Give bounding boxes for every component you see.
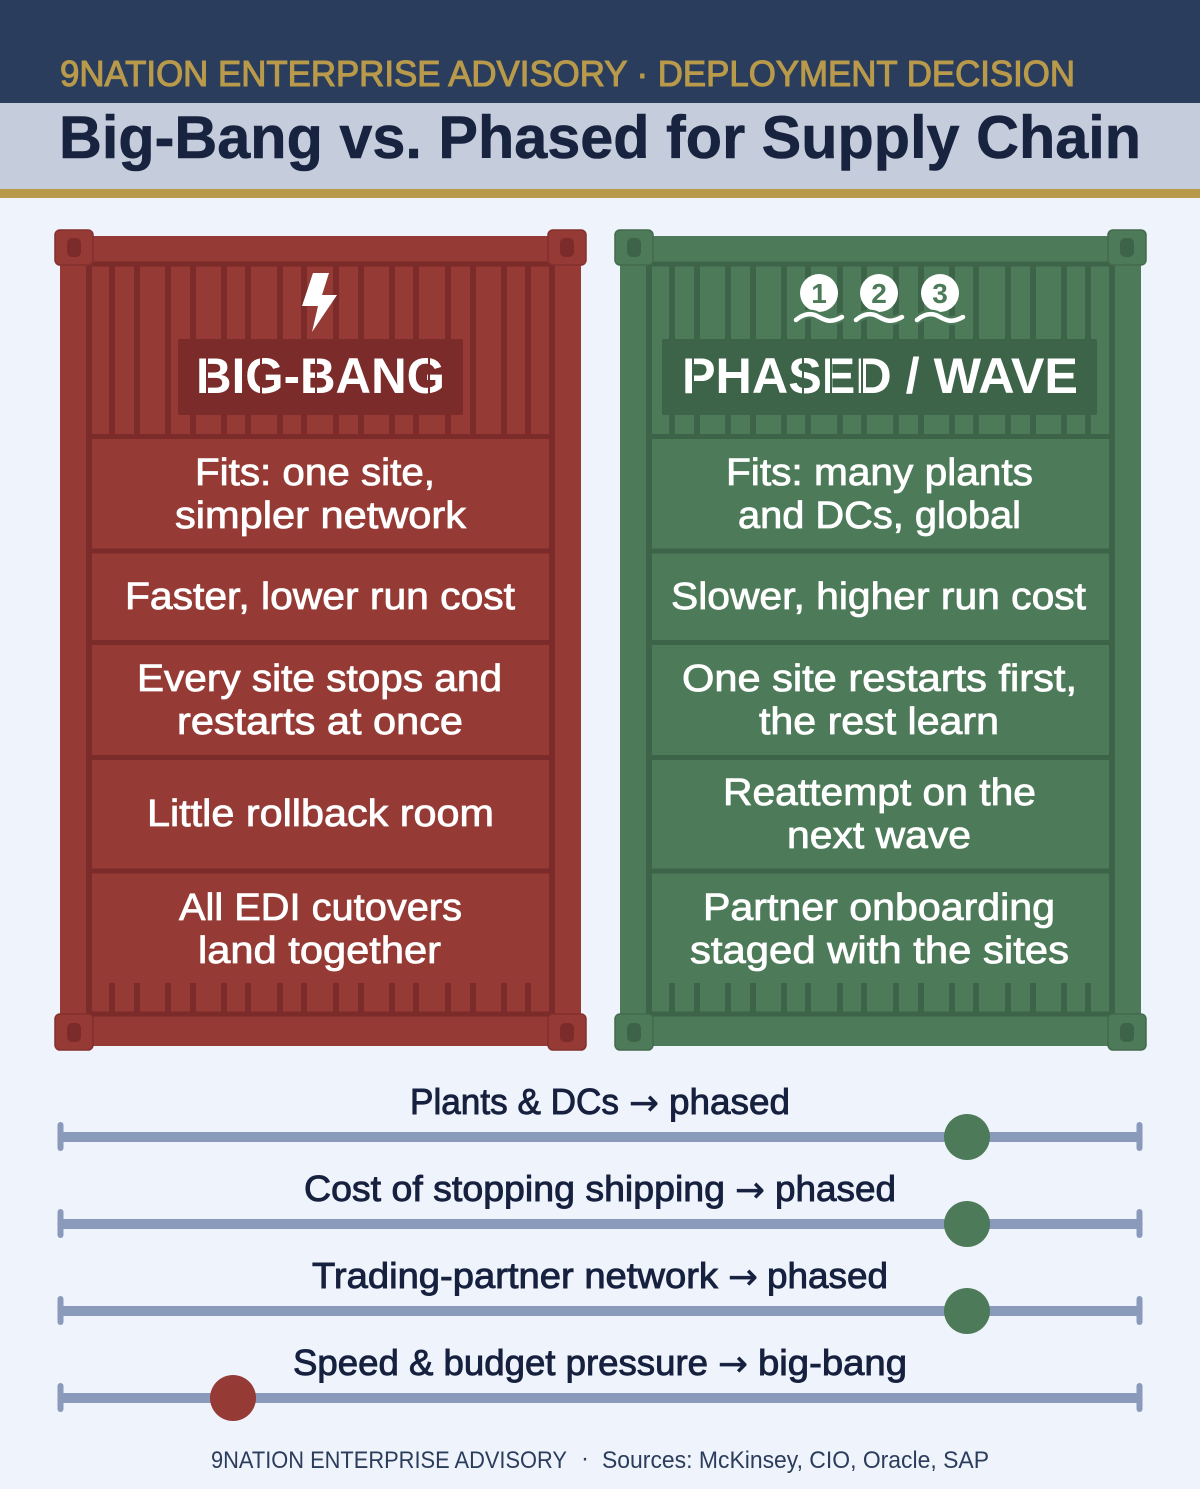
- row: EDI: land together: [198, 930, 441, 972]
- row: speed and cost: Slower, higher run cost: [671, 576, 1086, 618]
- row: fit: [726, 452, 1033, 537]
- row: partner onboarding: staged with the sites: [690, 930, 1069, 972]
- slider: trading-partner network: Trading-partner network: [312, 1255, 719, 1296]
- slider: cost of stopping shipping: →: [735, 1170, 765, 1211]
- heading plate: phased: [662, 339, 1097, 415]
- icon: numbered waves: 3: [932, 278, 948, 309]
- footer: ·: [581, 1445, 589, 1472]
- row: fit: simpler network: [175, 495, 467, 537]
- slider: trading-partner network: [58, 1255, 1142, 1334]
- slider: cost of stopping shipping: Cost of stopping shipping: [304, 1168, 725, 1209]
- row: EDI: [179, 887, 462, 972]
- slider: speed and budget pressure: big-bang: [758, 1342, 907, 1383]
- panel: phased container: [615, 230, 1146, 1050]
- row: speed and cost: Faster, lower run cost: [125, 576, 515, 618]
- row: fit: Fits: one site,: [195, 452, 435, 494]
- slider: speed and budget pressure: →: [718, 1344, 748, 1385]
- row: fit: and DCs, global: [738, 495, 1021, 537]
- row: partner onboarding: [690, 887, 1069, 972]
- heading plate: phased: PHASED / WAVE: [682, 348, 1078, 404]
- row: reattempt: next wave: [787, 815, 971, 857]
- heading plate: big-bang: [178, 339, 463, 415]
- row: restart: Every site stops and: [137, 658, 502, 700]
- footer: 9NATION ENTERPRISE ADVISORY: [211, 1447, 567, 1474]
- row: fit: [175, 452, 467, 537]
- slider: trading-partner network: phased: [767, 1255, 888, 1296]
- title: Big-Bang vs. Phased for Supply Chain: [59, 104, 1141, 171]
- row: restart: One site restarts first,: [682, 658, 1077, 700]
- row: reattempt: Reattempt on the: [723, 772, 1036, 814]
- row: restart: [137, 658, 502, 743]
- heading plate: big-bang: BIG-BANG: [196, 348, 445, 404]
- panel: big-bang container: [55, 230, 586, 1050]
- row: fit: Fits: many plants: [726, 452, 1033, 494]
- slider: cost of stopping shipping: [58, 1168, 1142, 1247]
- icon: numbered waves: 1: [811, 278, 827, 309]
- row: EDI: All EDI cutovers: [179, 887, 462, 929]
- row: partner onboarding: Partner onboarding: [703, 887, 1055, 929]
- footer: [211, 1445, 989, 1474]
- slider: trading-partner network: →: [728, 1257, 758, 1298]
- slider: plants and DCs: [58, 1081, 1142, 1160]
- icon: numbered waves: [796, 274, 963, 321]
- row: restart: [682, 658, 1077, 743]
- icon: numbered waves: 2: [871, 278, 887, 309]
- eyebrow text: 9NATION ENTERPRISE ADVISORY · DEPLOYMENT DECISION: [60, 53, 1075, 94]
- row: reattempt: [723, 772, 1036, 857]
- row: restart: the rest learn: [759, 701, 999, 743]
- slider: speed and budget pressure: [58, 1342, 1142, 1421]
- header band: [0, 0, 1200, 198]
- row: rollback: Little rollback room: [147, 793, 494, 835]
- slider: cost of stopping shipping: phased: [775, 1168, 896, 1209]
- slider: plants and DCs: →: [629, 1083, 659, 1124]
- slider: plants and DCs: phased: [669, 1081, 790, 1122]
- footer: Sources: McKinsey, CIO, Oracle, SAP: [602, 1447, 989, 1474]
- slider: speed and budget pressure: Speed & budget pressure: [293, 1342, 708, 1383]
- icon: lightning bolt: [302, 273, 337, 332]
- row: restart: restarts at once: [177, 701, 463, 743]
- slider: plants and DCs: Plants & DCs: [410, 1081, 619, 1122]
